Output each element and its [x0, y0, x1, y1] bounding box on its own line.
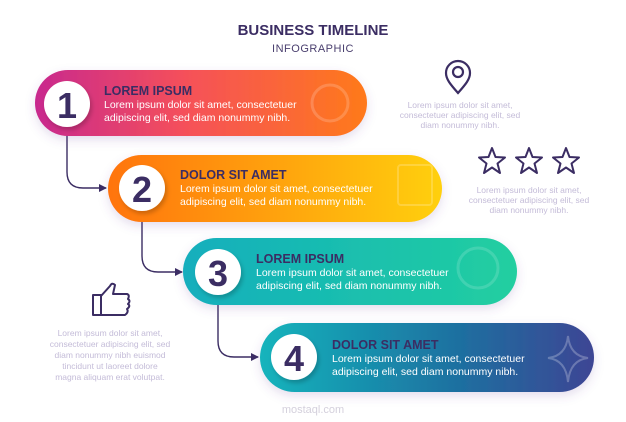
subtitle: INFOGRAPHIC: [272, 43, 354, 55]
panel: step 3: [183, 238, 517, 305]
panel: step 4: DOLOR SIT AMET: [332, 338, 439, 352]
panel: step 3: adipiscing elit, sed diam nonummy nibh.: [256, 280, 442, 292]
panel: step 2: Lorem ipsum dolor sit amet, consectetuer: [180, 183, 373, 195]
text: thumbs note: magna aliquam erat volutpat.: [55, 372, 165, 382]
text: stars note: diam nonummy nibh.: [490, 205, 568, 215]
panel: step 3: LOREM IPSUM: [256, 252, 344, 266]
text: thumbs note: [50, 328, 171, 382]
icon: location pin: [446, 61, 470, 93]
panel: step 2: [108, 155, 442, 222]
text: pin note: diam nonummy nibh.: [421, 120, 499, 130]
icon: thumbs up: [93, 284, 130, 315]
arrow: 1 to 2: [67, 125, 106, 188]
panel: step 4: adipiscing elit, sed diam nonummy nibh.: [332, 366, 518, 378]
text: pin note: [400, 100, 521, 130]
panel: step 2: DOLOR SIT AMET: [180, 168, 287, 182]
panel: step 4: [260, 323, 594, 392]
text: thumbs note: consectetuer adipiscing elit, sed: [50, 339, 171, 349]
text: stars note: consectetuer adipiscing elit, sed: [469, 195, 590, 205]
panel: step 1: LOREM IPSUM: [104, 84, 192, 98]
text: thumbs note: tincidunt ut laoreet dolore: [62, 361, 158, 371]
panel: step 1: 1: [57, 85, 77, 126]
text: pin note: Lorem ipsum dolor sit amet,: [408, 100, 512, 110]
text: pin note: consectetuer adipiscing elit, sed: [400, 110, 521, 120]
panel: step 4: Lorem ipsum dolor sit amet, consectetuer: [332, 353, 525, 365]
arrow: 2 to 3: [142, 210, 182, 272]
watermark: mostaql.com: [282, 404, 344, 416]
icon: stars: [479, 148, 579, 173]
panel: step 2: adipiscing elit, sed diam nonummy nibh.: [180, 196, 366, 208]
title: BUSINESS TIMELINE: [238, 22, 388, 39]
text: thumbs note: Lorem ipsum dolor sit amet,: [58, 328, 162, 338]
panel: step 3: 3: [208, 253, 228, 294]
panel: step 1: adipiscing elit, sed diam nonummy nibh.: [104, 112, 290, 124]
panel: step 1: Lorem ipsum dolor sit amet, consectetuer: [104, 99, 297, 111]
text: stars note: Lorem ipsum dolor sit amet,: [477, 185, 581, 195]
panel: step 4: 4: [284, 338, 304, 379]
panel: step 3: Lorem ipsum dolor sit amet, consectetuer: [256, 267, 449, 279]
panel: step 2: 2: [132, 169, 152, 210]
panel: step 1: [35, 70, 367, 136]
text: stars note: [469, 185, 590, 215]
arrow: 3 to 4: [218, 294, 258, 357]
text: thumbs note: diam nonummy nibh euismod: [54, 350, 166, 360]
